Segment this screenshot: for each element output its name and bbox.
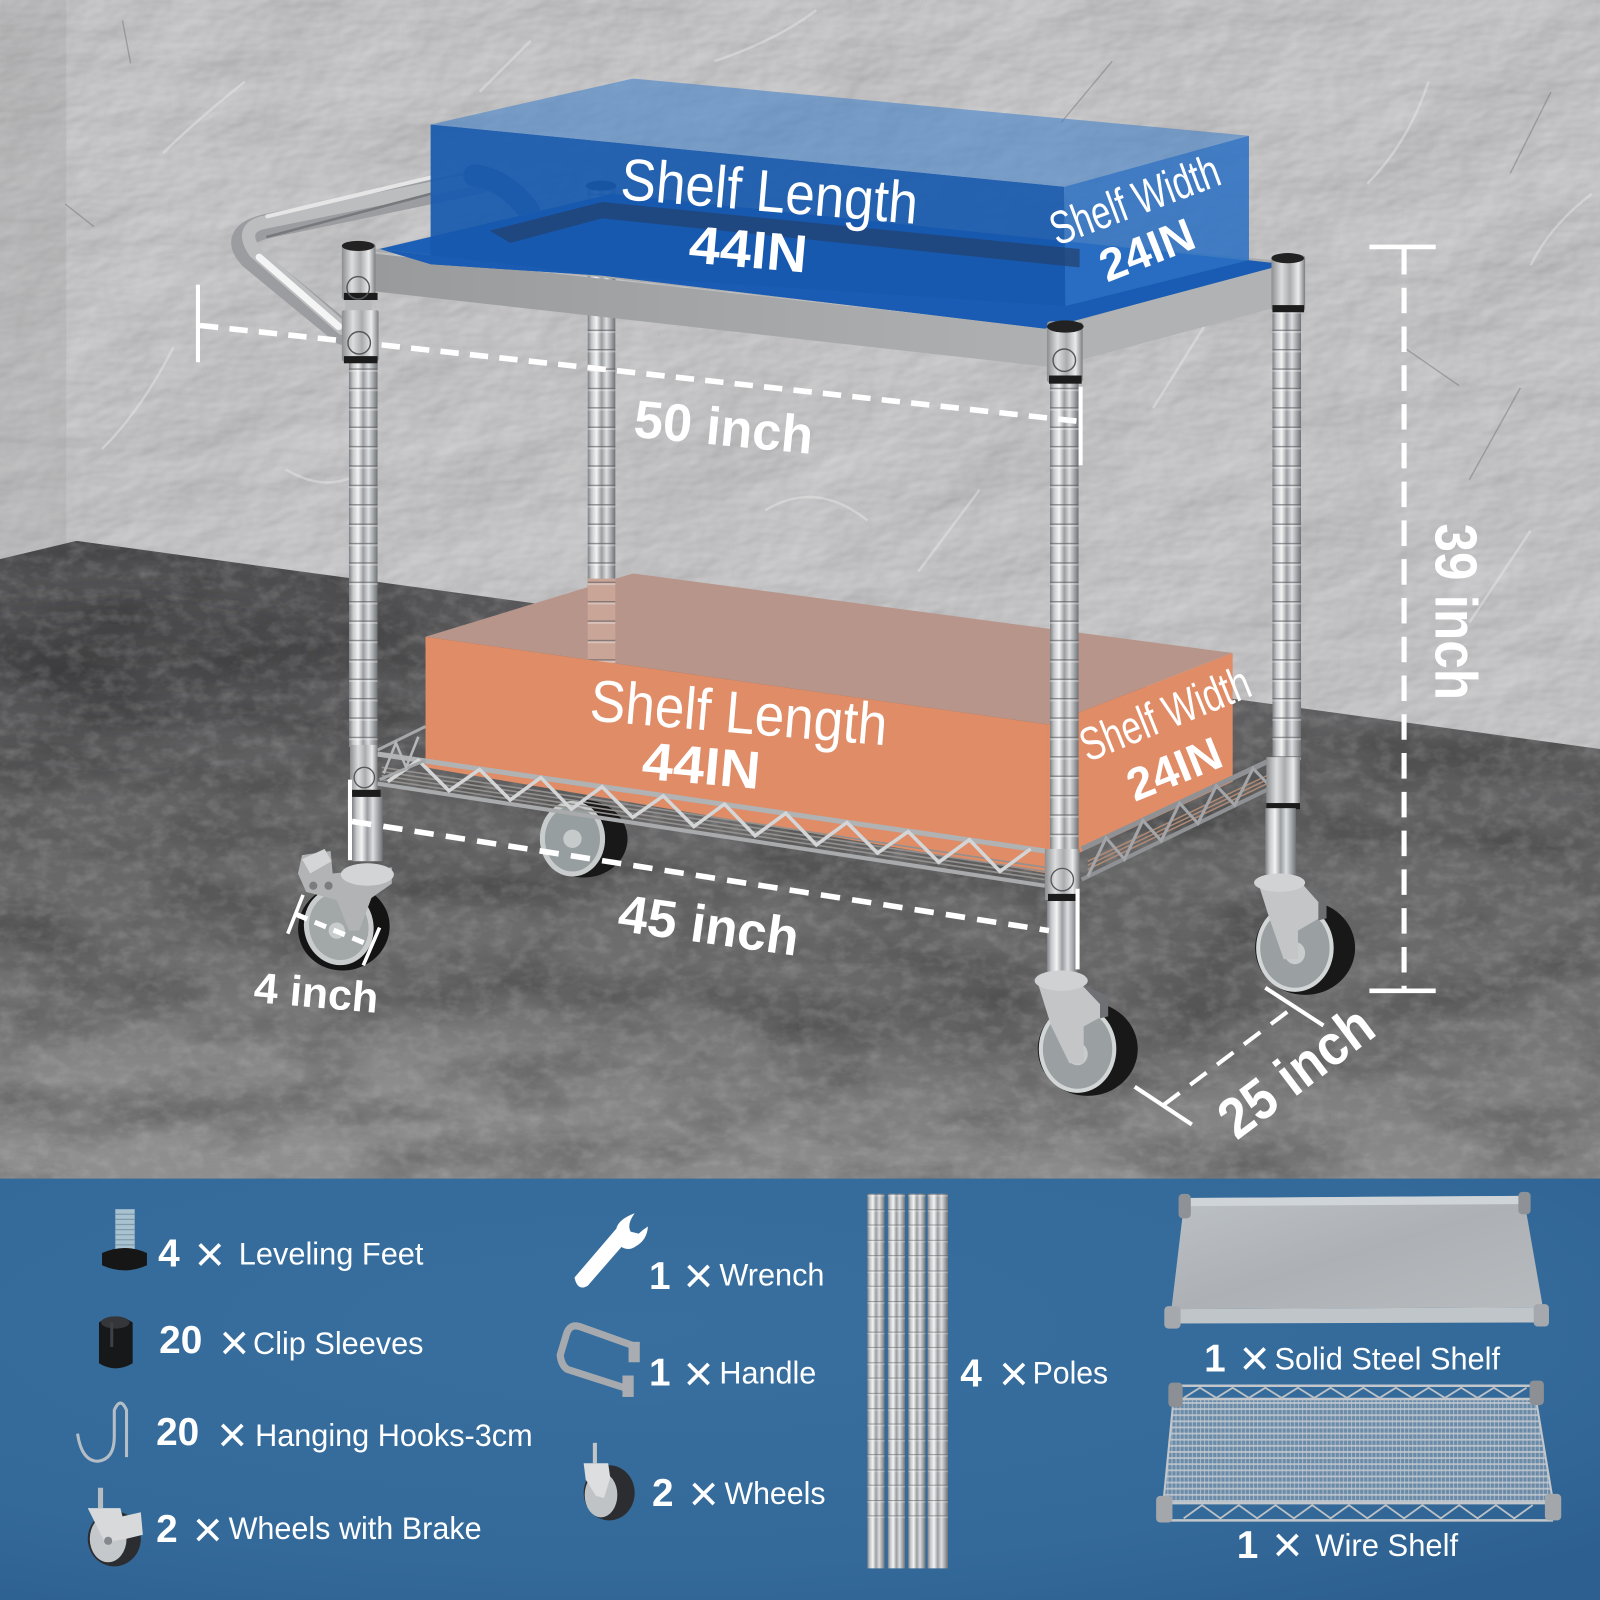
background: stone wall: [0, 0, 1600, 776]
item: 1 Wire Shelf: Wire Shelf: [1315, 1527, 1458, 1563]
item: 1 Handle: ×: [684, 1345, 713, 1402]
item: 4 Poles: 4: [960, 1353, 982, 1396]
rear left pole: [586, 181, 616, 663]
item: 20 Hanging Hooks-3cm: ×: [217, 1406, 247, 1463]
icon: four poles: [867, 1194, 948, 1568]
item: 1 Wrench: ×: [684, 1247, 713, 1304]
item: 4 Poles: ×: [999, 1345, 1029, 1402]
label: Shelf Length bottom: Shelf Length: [588, 667, 890, 758]
front left pole with sleeves: [342, 241, 383, 861]
panel: included parts: [0, 1179, 1600, 1600]
background: concrete floor: [0, 531, 1600, 1184]
label: 50 inch: 50 inch: [632, 390, 816, 466]
label: 44IN top: 44IN: [687, 215, 810, 285]
label: Shelf Width bottom: Shelf Width: [1072, 656, 1258, 772]
orange box text: [588, 656, 1258, 811]
item: 2 Wheels: ×: [689, 1465, 719, 1522]
rear left caster: [540, 800, 628, 878]
blue overlay box on top shelf: [380, 79, 1285, 329]
dimension: 45 inch shelf length: [350, 780, 1078, 969]
item: 2 Wheels: [652, 1465, 826, 1522]
label: 24IN top: 24IN: [1092, 208, 1202, 292]
icon: leveling foot: [102, 1209, 147, 1270]
item: 1 Wrench: 1: [649, 1255, 671, 1298]
front left caster with brake: [290, 849, 398, 979]
item: 1 Wrench: Wrench: [719, 1257, 824, 1293]
cart handle: [243, 176, 529, 333]
front right caster: [1035, 970, 1138, 1096]
item: 20 Hanging Hooks-3cm: [156, 1406, 533, 1463]
item: 20 Hanging Hooks-3cm: Hanging Hooks-3cm: [255, 1417, 533, 1453]
label: 39 inch: 39 inch: [1423, 523, 1490, 700]
label: 4 inch: 4 inch: [252, 964, 380, 1023]
icon: wheel with brake: [88, 1488, 143, 1566]
item: 1 Solid Steel Shelf: [1204, 1330, 1500, 1387]
item: 1 Solid Steel Shelf: Solid Steel Shelf: [1274, 1340, 1500, 1376]
item: 2 Wheels with Brake: Wheels with Brake: [229, 1510, 482, 1546]
item: 4 Poles: Poles: [1033, 1355, 1108, 1391]
dimension: 39 inch height: [1369, 247, 1436, 991]
item: 2 Wheels: 2: [652, 1472, 674, 1515]
rear right sleeve at top shelf: [1271, 253, 1305, 312]
item: 1 Solid Steel Shelf: 1: [1204, 1337, 1226, 1380]
icon: clip sleeve: [99, 1316, 133, 1368]
dimension: 50 inch overall length: [198, 285, 1081, 465]
item: 20 Clip Sleeves: [159, 1314, 423, 1371]
item: 20 Clip Sleeves: ×: [219, 1314, 249, 1371]
icon: solid steel shelf: [1164, 1192, 1549, 1329]
item: 1 Wire Shelf: ×: [1272, 1516, 1302, 1573]
item: 4 Leveling Feet: ×: [195, 1225, 225, 1282]
item: 1 Handle: Handle: [719, 1355, 816, 1391]
dimension: 25 inch width: [1135, 988, 1323, 1124]
item: 1 Wire Shelf: 1: [1237, 1524, 1258, 1567]
front right pole with sleeves: [1045, 320, 1084, 972]
item: 1 Handle: 1: [649, 1352, 671, 1395]
item: 20 Clip Sleeves: 20: [159, 1319, 202, 1362]
item: 4 Poles: [960, 1345, 1108, 1402]
item: 1 Handle: [649, 1345, 816, 1402]
item: 4 Leveling Feet: [158, 1225, 424, 1282]
item: 1 Wrench: [649, 1247, 824, 1304]
item: 1 Wire Shelf: [1237, 1516, 1458, 1573]
item: 2 Wheels with Brake: [156, 1501, 482, 1558]
blue box text: [618, 144, 1227, 292]
lower orange box: Shelf Length 44IN, Shelf Width 24IN: [426, 573, 1233, 873]
label: 24IN bottom: 24IN: [1119, 726, 1229, 811]
icon: handle: [560, 1326, 640, 1397]
wire lower shelf: [378, 727, 1276, 886]
item: 20 Hanging Hooks-3cm: 20: [156, 1411, 199, 1454]
item: 4 Leveling Feet: 4: [158, 1232, 180, 1275]
item: 2 Wheels with Brake: 2: [156, 1508, 178, 1551]
icon: wire shelf: [1156, 1381, 1561, 1522]
item: 2 Wheels with Brake: ×: [193, 1501, 223, 1558]
rear right pole and caster: [1254, 311, 1355, 995]
item: 4 Leveling Feet: Leveling Feet: [239, 1235, 424, 1271]
label: 25 inch: 25 inch: [1206, 993, 1386, 1151]
icon: wrench: [574, 1213, 648, 1288]
dimension: 4 inch wheel: [288, 895, 380, 965]
item: 20 Clip Sleeves: Clip Sleeves: [253, 1325, 423, 1361]
label: 45 inch: 45 inch: [615, 884, 803, 968]
icon: wheel: [584, 1443, 635, 1520]
item: 1 Solid Steel Shelf: ×: [1240, 1330, 1270, 1387]
solid steel top shelf: [369, 196, 1284, 367]
icon: hanging hook: [78, 1403, 127, 1461]
label: 44IN bottom: 44IN: [640, 732, 763, 801]
item: 2 Wheels: Wheels: [724, 1475, 826, 1511]
label: Shelf Width top: Shelf Width: [1042, 144, 1227, 255]
label: Shelf Length top: Shelf Length: [618, 145, 921, 237]
